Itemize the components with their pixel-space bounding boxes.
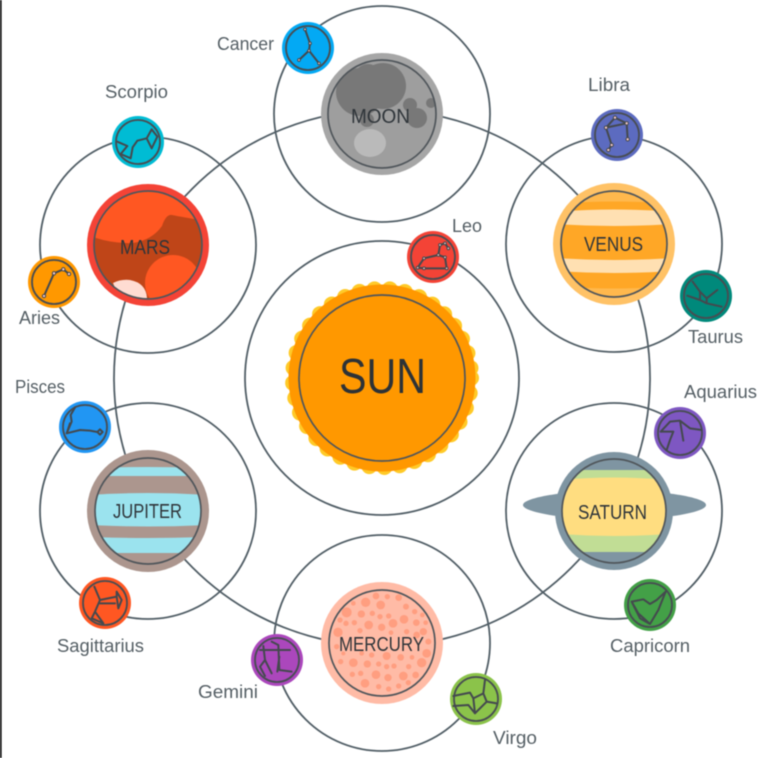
zodiac: sagittarius xyxy=(57,577,144,656)
zodiac: virgo: Virgo xyxy=(493,728,537,748)
zodiac: taurus: Taurus xyxy=(688,327,743,347)
planet: jupiter: JUPITER xyxy=(113,501,182,523)
planet: sun xyxy=(288,284,476,472)
zodiac: sagittarius: Sagittarius xyxy=(57,636,144,656)
planet: mars xyxy=(87,184,209,311)
zodiac: capricorn xyxy=(610,579,690,656)
zodiac: cancer: Cancer xyxy=(217,34,274,54)
zodiac: scorpio xyxy=(105,82,168,168)
zodiac: libra: Libra xyxy=(588,75,631,95)
zodiac: leo xyxy=(407,216,482,283)
zodiac: scorpio: Scorpio xyxy=(105,82,168,102)
zodiac: pisces: Pisces xyxy=(15,377,65,397)
zodiac: capricorn: Capricorn xyxy=(610,636,690,656)
planet: moon: MOON xyxy=(351,106,410,128)
planet: venus xyxy=(553,183,675,305)
planet: saturn xyxy=(523,452,706,570)
zodiac: taurus xyxy=(680,270,743,347)
zodiac: aries xyxy=(19,256,80,328)
planet: moon xyxy=(321,53,443,175)
zodiac: aquarius: Aquarius xyxy=(684,382,757,402)
zodiac: gemini: Gemini xyxy=(198,682,258,702)
planet: venus: VENUS xyxy=(584,234,643,256)
planet: sun: SUN xyxy=(339,350,426,404)
zodiac: gemini xyxy=(198,634,303,702)
planet: mars: MARS xyxy=(120,237,170,259)
zodiac: pisces xyxy=(15,377,111,453)
zodiac: libra xyxy=(588,75,643,161)
zodiac: leo: Leo xyxy=(452,216,482,236)
zodiac: virgo xyxy=(450,673,537,748)
planet: mercury: MERCURY xyxy=(339,634,424,656)
zodiac: aries: Aries xyxy=(19,308,60,328)
zodiac: cancer xyxy=(217,22,334,74)
planet: jupiter xyxy=(87,450,209,572)
zodiac: aquarius xyxy=(654,382,757,459)
planet: mercury xyxy=(321,582,443,704)
planet: saturn: SATURN xyxy=(578,502,647,524)
